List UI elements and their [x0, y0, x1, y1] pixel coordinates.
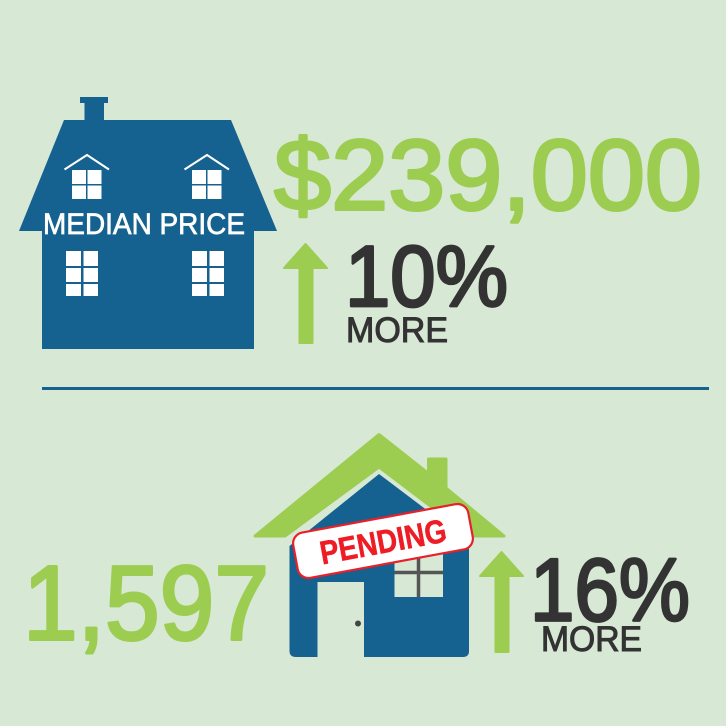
- percent change: 10%: [345, 229, 508, 325]
- icon: door knob: [355, 620, 361, 626]
- icon: upper left window: [64, 155, 109, 199]
- icon: up arrow: [284, 244, 327, 343]
- divider: [42, 387, 709, 390]
- icon: blue house body: [290, 474, 469, 657]
- icon: door: [318, 582, 364, 657]
- icon: up arrow: [480, 552, 523, 652]
- price figure: $239,000: [274, 120, 702, 232]
- panel: pending sales: [23, 434, 690, 662]
- icon: blue house: [19, 97, 277, 349]
- icon: lower left window: [66, 251, 98, 296]
- pending sign: [291, 502, 475, 580]
- pending text: PENDING: [317, 512, 449, 571]
- icon: lower right window: [192, 251, 224, 296]
- icon: green roof: [255, 434, 504, 536]
- more label: MORE: [541, 620, 642, 659]
- icon: upper right window: [184, 155, 229, 199]
- panel: median price: [19, 97, 702, 350]
- more label: MORE: [346, 311, 448, 350]
- pending count: 1,597: [23, 544, 269, 662]
- icon: window: [394, 550, 443, 597]
- percent change: 16%: [530, 540, 690, 640]
- label: median price: MEDIAN PRICE: [43, 208, 245, 241]
- icon: pending house: [255, 434, 504, 657]
